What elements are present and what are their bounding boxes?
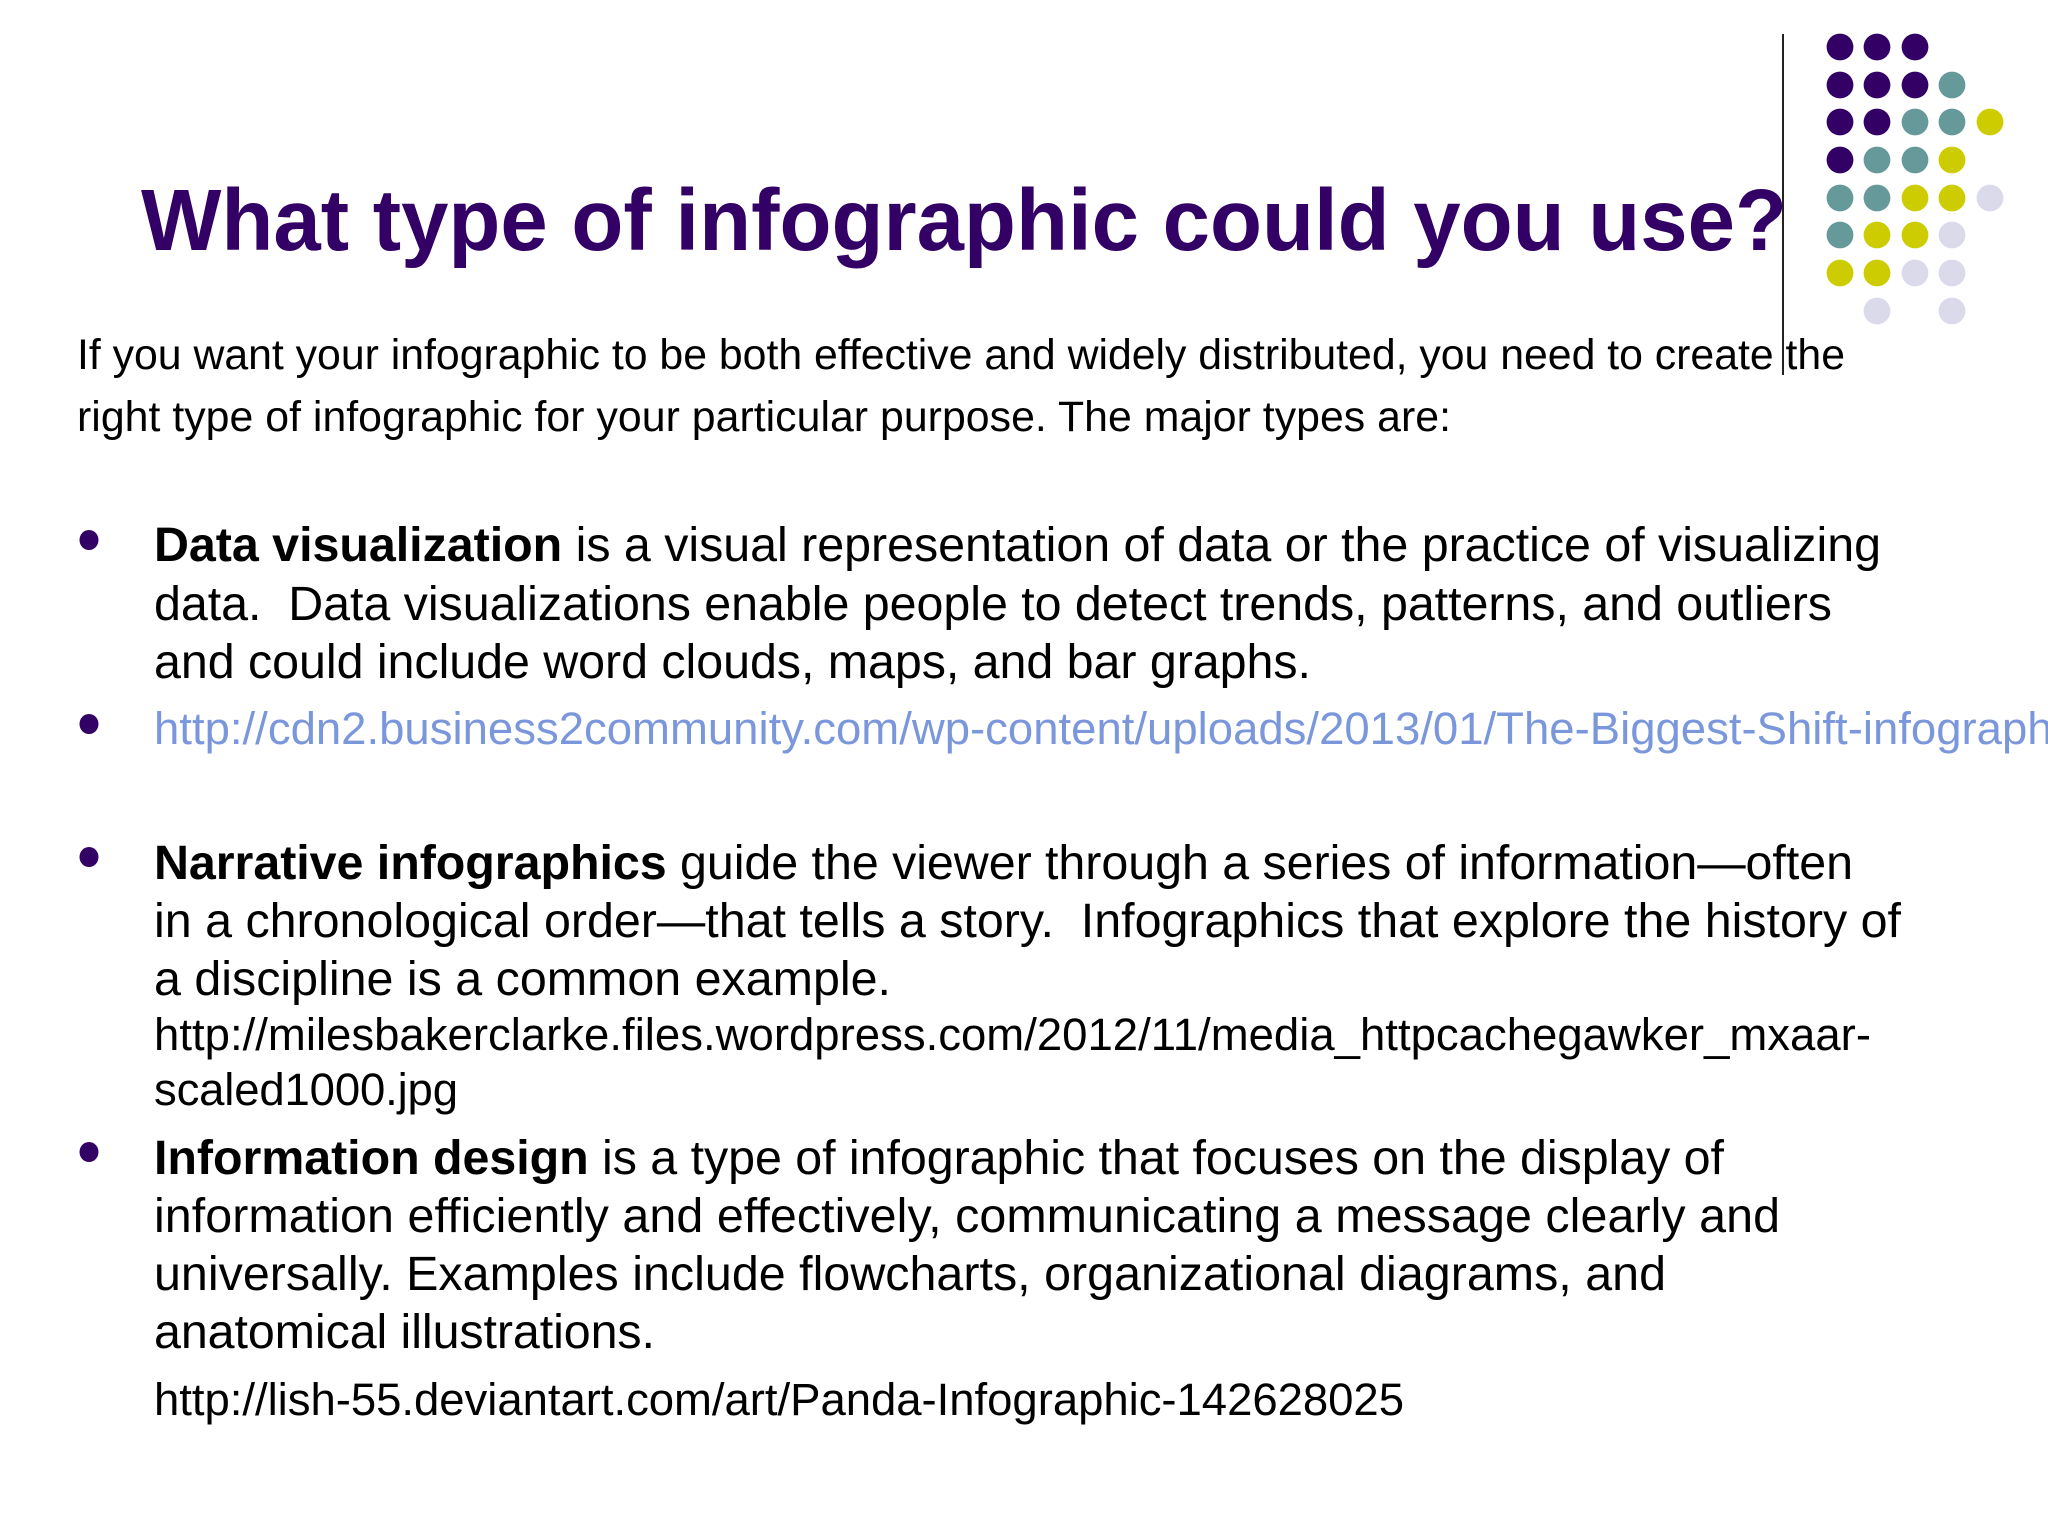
panel: data visualization link: [80, 703, 2048, 754]
information design text: information efficiently and effectively, communicating a message clearly and: [154, 1189, 1780, 1243]
information design text: [154, 1131, 1780, 1425]
icon: decorative dot grid: [1827, 34, 2003, 324]
bullet marker: [80, 847, 98, 867]
bullet marker: [80, 714, 98, 734]
narrative text: a discipline is a common example.: [154, 952, 891, 1006]
information design text: Information design is a type of infographic that focuses on the display of: [154, 1131, 1725, 1185]
panel: data visualization bullet: [80, 518, 1881, 689]
data visualization text: Data visualization is a visual representation of data or the practice of visualizing: [154, 518, 1881, 572]
data visualization text: and could include word clouds, maps, and bar graphs.: [154, 635, 1311, 689]
intro text: If you want your infographic to be both effective and widely distributed, you need to create the: [77, 331, 1845, 379]
title: What type of infographic could you use?: [141, 172, 1787, 269]
vertical rule: [1782, 34, 1784, 375]
information design text: anatomical illustrations.: [154, 1305, 655, 1359]
narrative text: scaled1000.jpg: [154, 1064, 458, 1115]
information design text: universally. Examples include flowcharts, organizational diagrams, and: [154, 1247, 1666, 1301]
data visualization text: [154, 518, 1881, 689]
bullet marker: [80, 530, 98, 550]
panel: information design bullet: [80, 1131, 1780, 1425]
bullet marker: [80, 1142, 98, 1162]
intro text: [77, 331, 1845, 441]
information design text: http://lish-55.deviantart.com/art/Panda-Infographic-142628025: [154, 1374, 1404, 1425]
narrative text: Narrative infographics guide the viewer through a series of information—often: [154, 836, 1853, 890]
data visualization text: data. Data visualizations enable people to detect trends, patterns, and outliers: [154, 577, 1832, 631]
intro text: right type of infographic for your particular purpose. The major types are:: [77, 393, 1451, 441]
narrative text: [154, 836, 1902, 1115]
narrative text: in a chronological order—that tells a story. Infographics that explore the history of: [154, 894, 1902, 948]
narrative text: http://milesbakerclarke.files.wordpress.com/2012/11/media_httpcachegawker_mxaar-: [154, 1009, 1871, 1060]
panel: narrative infographics bullet: [80, 836, 1902, 1115]
